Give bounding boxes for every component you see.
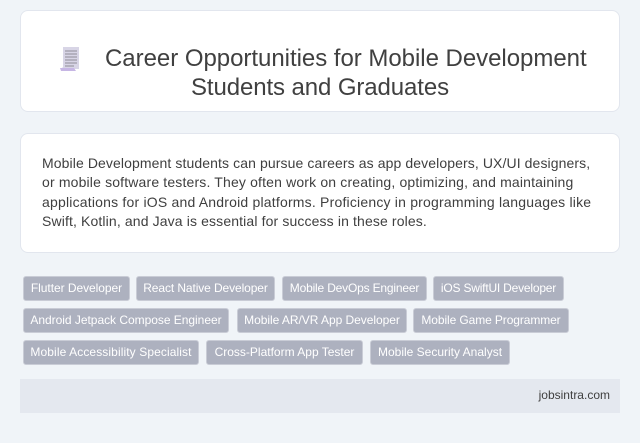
tag: Mobile Security Analyst bbox=[378, 345, 502, 359]
panel: description text: applications for iOS and Android platforms. Proficiency in programming languages like bbox=[42, 194, 591, 210]
tag: React Native Developer bbox=[143, 281, 268, 295]
tag bbox=[282, 276, 427, 301]
tag bbox=[136, 276, 275, 301]
panel: description text: Swift, Kotlin, and Java is essential for success in these roles. bbox=[42, 213, 427, 229]
title: Career Opportunities for Mobile Development bbox=[105, 45, 587, 72]
panel: description text: Mobile Development students can pursue careers as app developers, UX/UI designers, bbox=[42, 155, 590, 171]
tag bbox=[23, 340, 199, 365]
tag bbox=[433, 276, 564, 301]
tag bbox=[23, 276, 130, 301]
tag bbox=[237, 308, 407, 333]
tag: Cross-Platform App Tester bbox=[215, 345, 354, 359]
tag bbox=[370, 340, 510, 365]
tag bbox=[206, 340, 363, 365]
footer source text: jobsintra.com bbox=[539, 388, 610, 402]
panel: career tags bbox=[23, 276, 569, 365]
tag: Mobile AR/VR App Developer bbox=[244, 313, 400, 327]
title bbox=[105, 45, 587, 101]
tag: Flutter Developer bbox=[31, 281, 122, 295]
icon: document scroll bbox=[60, 47, 79, 71]
panel: description text: or mobile software testers. They often work on creating, optimizing, and maintaining bbox=[42, 174, 573, 190]
title: Students and Graduates bbox=[191, 74, 449, 101]
tag: Mobile DevOps Engineer bbox=[290, 281, 419, 295]
tag bbox=[23, 308, 229, 333]
tag: iOS SwiftUI Developer bbox=[441, 281, 556, 295]
panel: title card bbox=[20, 10, 620, 112]
tag: Mobile Game Programmer bbox=[421, 313, 561, 327]
tag: Android Jetpack Compose Engineer bbox=[30, 313, 222, 327]
footer bar bbox=[20, 379, 620, 413]
tag bbox=[413, 308, 569, 333]
tag: Mobile Accessibility Specialist bbox=[30, 345, 192, 359]
panel: description text bbox=[20, 133, 620, 253]
